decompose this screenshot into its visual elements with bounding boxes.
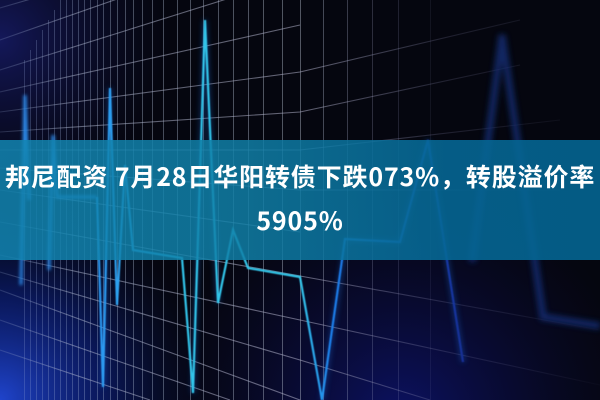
title text: 邦尼配资 7月28日华阳转债下跌073%，转股溢价率 <box>5 158 595 194</box>
title text: 5905% <box>256 202 344 238</box>
title banner <box>0 140 600 260</box>
main pulse line <box>97 20 463 400</box>
title text <box>5 158 595 238</box>
pulse line glow <box>103 20 463 400</box>
faint far-right pulse segment <box>472 35 600 326</box>
left soft spikes <box>21 95 97 285</box>
